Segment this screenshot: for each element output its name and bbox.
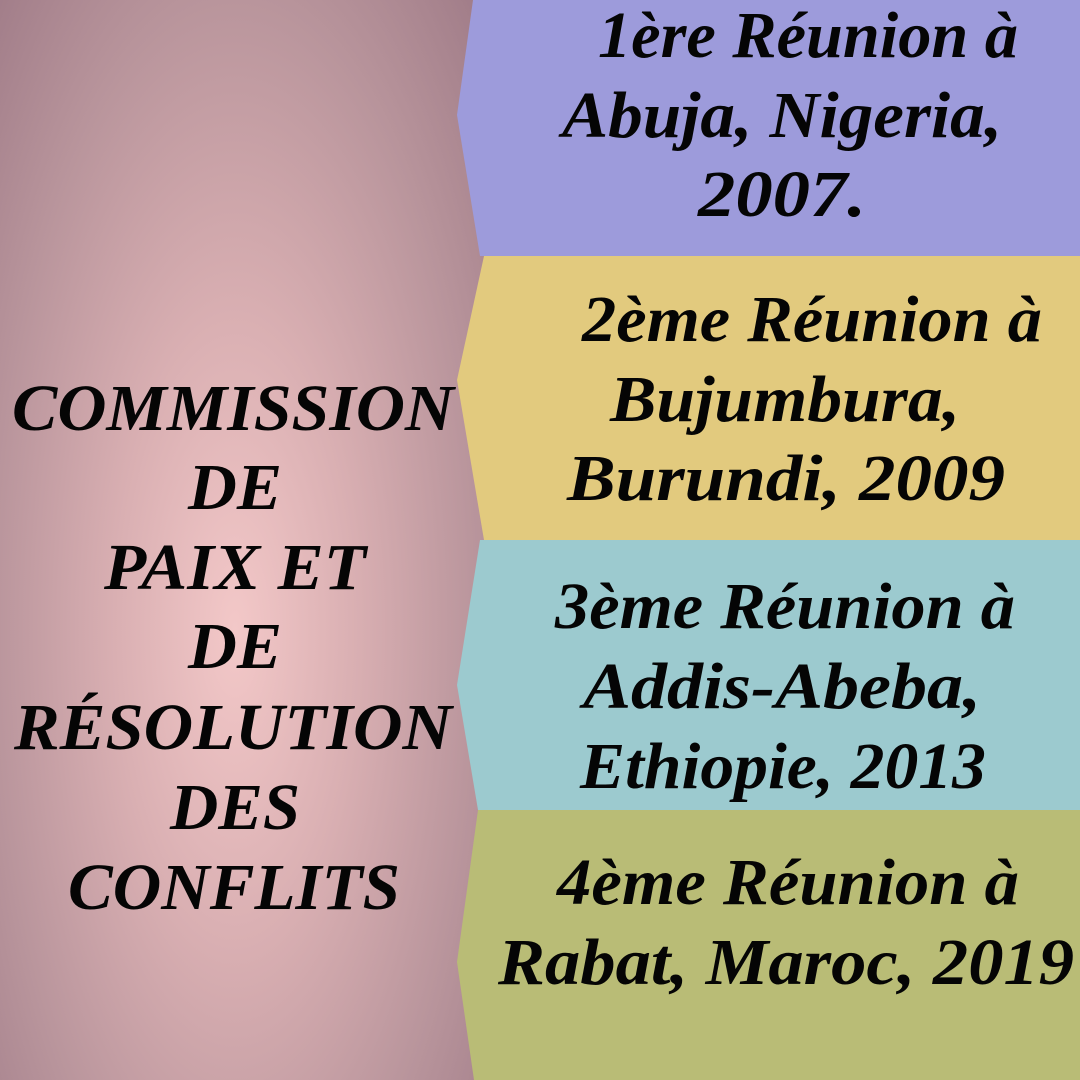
panel: second meeting, Bujumbura	[457, 256, 1080, 540]
panel: first meeting, Abuja: 1ère Réunion à	[598, 0, 1018, 72]
left panel title: DE	[187, 610, 282, 683]
left panel title: DE	[187, 451, 282, 524]
left panel title: CONFLITS	[68, 851, 400, 924]
panel: second meeting, Bujumbura: Burundi, 2009	[566, 442, 1005, 515]
panel: fourth meeting, Rabat: 4ème Réunion à	[555, 846, 1019, 919]
left panel title	[12, 372, 456, 924]
panel: fourth meeting, Rabat	[457, 810, 1080, 1080]
panel: fourth meeting, Rabat: Rabat, Maroc, 2019	[497, 926, 1074, 999]
left panel title: COMMISSION	[12, 372, 456, 445]
panel: second meeting, Bujumbura: 2ème Réunion à	[581, 283, 1042, 356]
panel: first meeting, Abuja: 2007.	[697, 158, 866, 231]
panel: first meeting, Abuja: Abuja, Nigeria,	[558, 79, 1002, 152]
left panel title: RÉSOLUTION	[13, 691, 454, 764]
panel: third meeting, Addis-Abeba	[457, 540, 1080, 810]
left panel title: DES	[169, 771, 300, 844]
left panel title: PAIX ET	[103, 531, 369, 604]
panel: third meeting, Addis-Abeba: 3ème Réunion à	[554, 570, 1015, 643]
panel: second meeting, Bujumbura: Bujumbura,	[609, 363, 960, 436]
panel: third meeting, Addis-Abeba: Ethiopie, 2013	[579, 730, 986, 803]
panel: third meeting, Addis-Abeba: Addis-Abeba,	[579, 650, 981, 723]
panel: first meeting, Abuja	[457, 0, 1080, 256]
